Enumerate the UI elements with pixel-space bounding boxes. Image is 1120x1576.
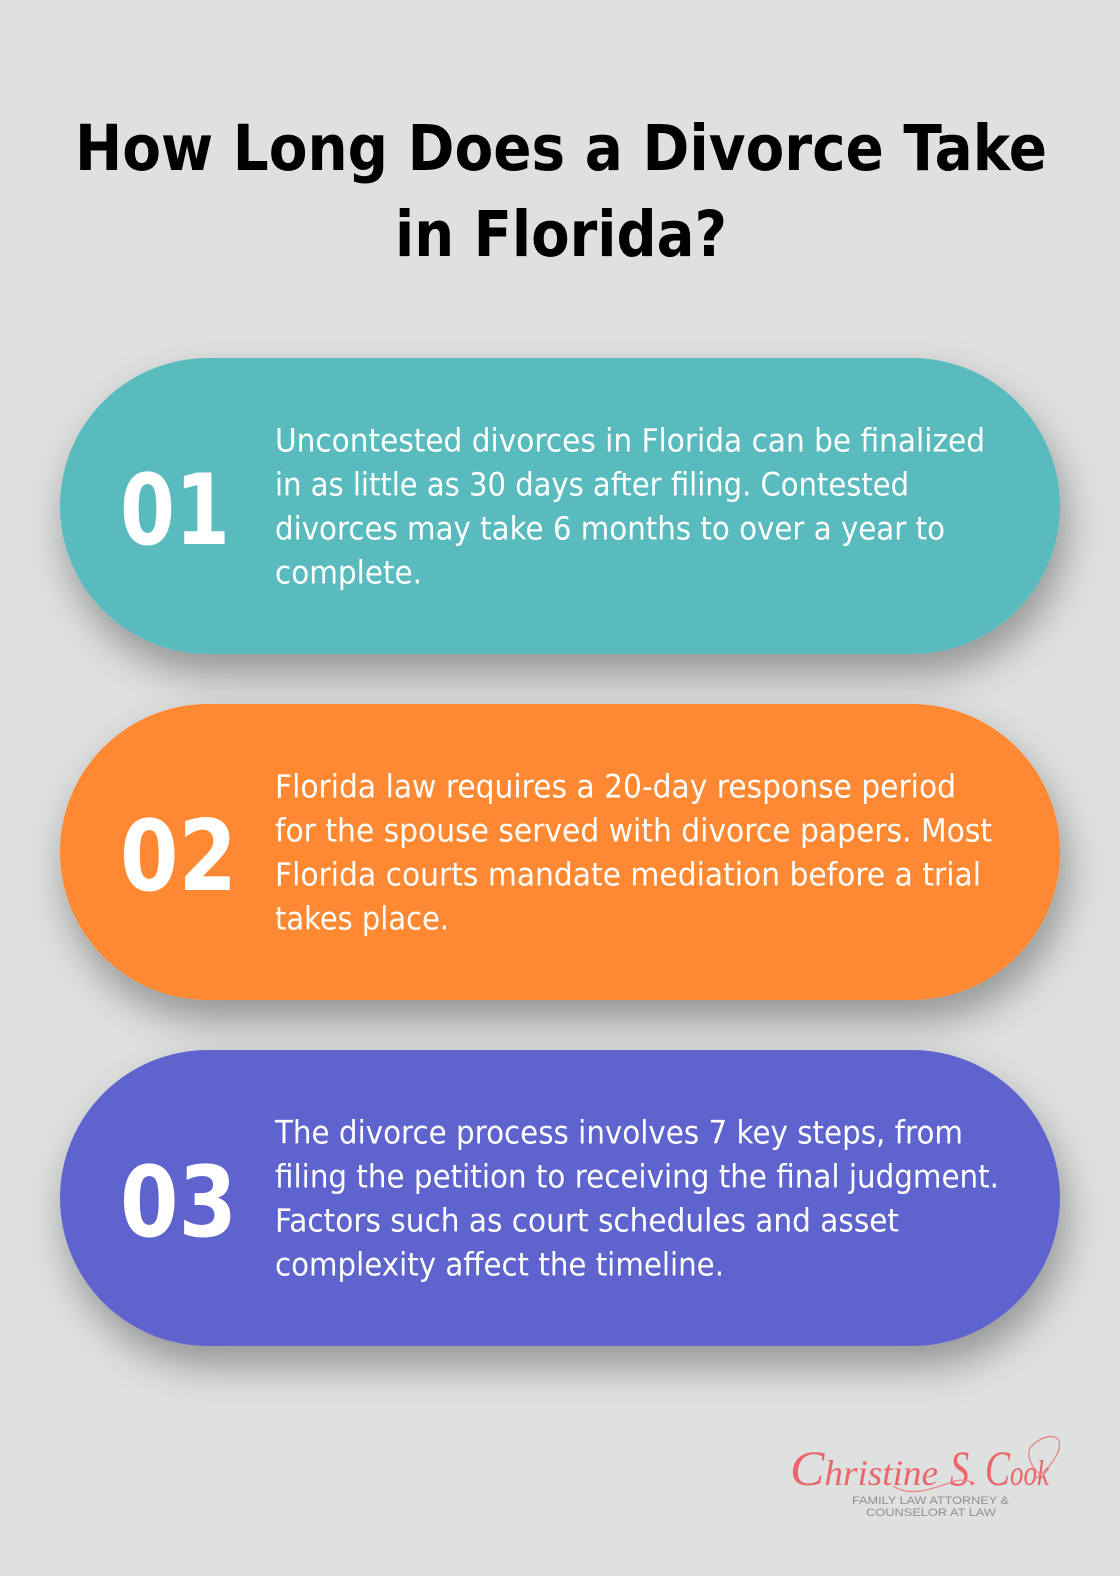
title <box>75 111 1047 271</box>
logo signature: Cook <box>985 1440 1050 1496</box>
pill: step 01 background <box>60 358 1060 654</box>
panel: step 01 <box>60 358 1060 654</box>
text block: step 02: Florida courts mandate mediation before a trial <box>275 856 981 894</box>
pill: step 02 background <box>60 704 1060 1000</box>
logo signature <box>790 1440 1050 1496</box>
text block: step 02 <box>275 768 992 938</box>
logo: Christine S. Cook: COUNSELOR AT LAW <box>866 1507 997 1519</box>
panel: step 03 <box>60 1050 1060 1346</box>
number 01: 01 <box>120 454 230 568</box>
panel: step 02 <box>60 704 1060 1000</box>
text block: step 03: Factors such as court schedules and asset <box>275 1202 899 1240</box>
text block: step 03 <box>274 1114 999 1284</box>
text block: step 02: for the spouse served with divorce papers. Most <box>275 812 992 850</box>
logo signature: Christine <box>790 1440 938 1496</box>
text block: step 03: filing the petition to receiving the final judgment. <box>275 1158 999 1196</box>
text block: step 01: divorces may take 6 months to over a year to <box>275 510 945 548</box>
title: in Florida? <box>395 197 727 271</box>
text block: step 02: Florida law requires a 20-day response period <box>275 768 956 806</box>
number 02: 02 <box>120 800 237 914</box>
logo swash <box>893 1437 1059 1492</box>
text block: step 03: The divorce process involves 7 key steps, from <box>274 1114 963 1152</box>
text block: step 01: complete. <box>275 554 422 592</box>
logo: Christine S. Cook <box>790 1437 1059 1519</box>
text block: step 02: takes place. <box>275 900 449 938</box>
text block: step 01: in as little as 30 days after filing. Contested <box>275 466 909 504</box>
text block: step 03: complexity affect the timeline. <box>275 1246 724 1284</box>
logo tagline: FAMILY LAW ATTORNEY & <box>852 1495 1010 1507</box>
number 03: 03 <box>120 1146 237 1260</box>
text block: step 01 <box>275 422 985 592</box>
logo signature: S. <box>950 1440 976 1496</box>
pill: step 03 background <box>60 1050 1060 1346</box>
text block: step 01: Uncontested divorces in Florida can be finalized <box>275 422 985 460</box>
